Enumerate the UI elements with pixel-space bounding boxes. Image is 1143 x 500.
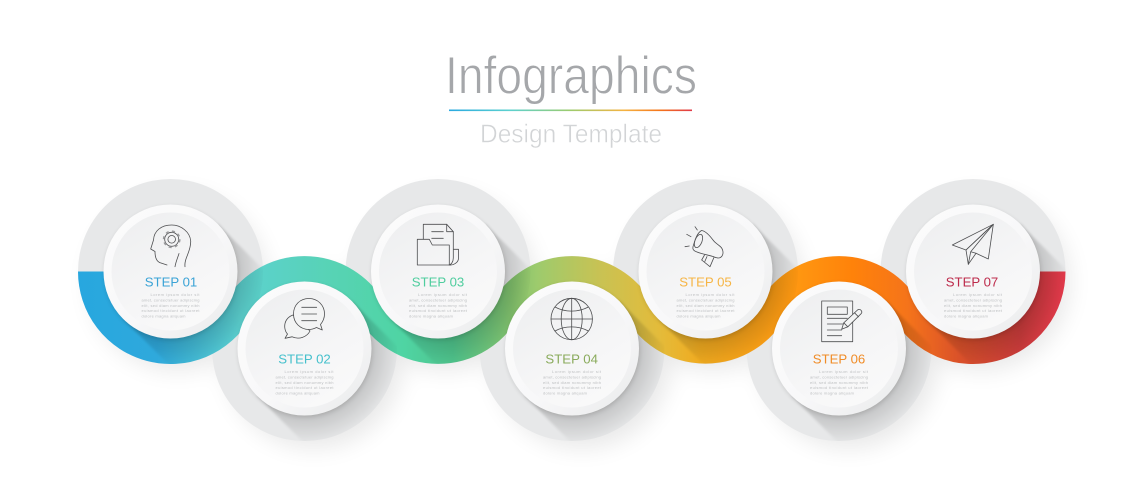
body text: dolore magna aliquam <box>276 390 320 396</box>
icon: paper plane <box>952 224 993 264</box>
body text <box>142 292 200 318</box>
body text: Lorem ipsum dolor sit <box>552 369 602 374</box>
body text: dolore magna aliquam <box>409 314 454 318</box>
title: Infographics <box>445 46 697 106</box>
panel: step 05 <box>638 204 773 340</box>
body text: euismod tincidunt ut laoreet <box>276 385 334 390</box>
body text: amet, consectetuer adipiscing <box>409 297 467 302</box>
soft ground shadows <box>90 194 1069 448</box>
icon: document and pencil <box>822 301 862 342</box>
body text: dolore magna aliquam <box>944 314 989 318</box>
panel: step 02 <box>238 282 372 417</box>
body text: elit, sed diam nonummy nibh <box>944 303 1002 308</box>
grey backing circles <box>78 179 1066 441</box>
body text: amet, consectetuer adipiscing <box>676 297 734 302</box>
body text: Lorem ipsum dolor sit <box>284 369 334 374</box>
body text: amet, consectetuer adipiscing <box>276 374 334 379</box>
body text: euismod tincidunt ut laoreet <box>142 308 200 313</box>
icon: folder with document <box>417 224 458 265</box>
body text: euismod tincidunt ut laoreet <box>543 385 602 390</box>
body text: amet, consectetuer adipiscing <box>944 297 1002 302</box>
subtitle: Design Template <box>480 118 662 148</box>
long shadows of the step circles <box>123 224 1062 438</box>
body text: euismod tincidunt ut laoreet <box>810 385 869 390</box>
step label: STEP 04 <box>545 352 598 367</box>
icon: speech bubbles <box>285 298 324 338</box>
body text: elit, sed diam nonummy nibh <box>276 380 334 385</box>
panel: step 04 <box>505 282 640 417</box>
step label: STEP 02 <box>278 352 331 367</box>
step label: STEP 07 <box>946 275 998 290</box>
body text: Lorem ipsum dolor sit <box>686 292 735 297</box>
panel: step 07 <box>906 204 1040 340</box>
body text: elit, sed diam nonummy nibh <box>543 380 601 385</box>
panel: step 03 <box>371 204 506 340</box>
icon: megaphone <box>685 227 723 267</box>
body text: euismod tincidunt ut laoreet <box>944 308 1003 313</box>
step label: STEP 01 <box>145 275 197 290</box>
step label: STEP 03 <box>412 275 464 290</box>
step label: STEP 06 <box>813 352 865 367</box>
body text <box>944 292 1003 318</box>
body text <box>543 369 602 396</box>
panel: step 01 <box>104 204 238 340</box>
icon: globe <box>551 298 592 340</box>
body text: elit, sed diam nonummy nibh <box>676 303 734 308</box>
body text: amet, consectetuer adipiscing <box>543 374 601 379</box>
body text: dolore magna aliquam <box>543 390 588 396</box>
panel: step 06 <box>772 282 906 417</box>
step label: STEP 05 <box>679 275 732 290</box>
body text: amet, consectetuer adipiscing <box>810 374 868 379</box>
body text <box>810 369 869 396</box>
icon: head with gear <box>151 225 191 267</box>
body text: elit, sed diam nonummy nibh <box>810 380 868 385</box>
body text <box>409 292 468 318</box>
body text: Lorem ipsum dolor sit <box>418 292 468 297</box>
body text: dolore magna aliquam <box>142 314 186 318</box>
body text: elit, sed diam nonummy nibh <box>142 303 200 308</box>
body text <box>276 369 334 396</box>
body text: dolore magna aliquam <box>676 314 721 318</box>
body text: dolore magna aliquam <box>810 390 855 396</box>
body text: amet, consectetuer adipiscing <box>142 297 200 302</box>
body text: Lorem ipsum dolor sit <box>953 292 1003 297</box>
rainbow wave ribbon <box>93 271 1050 349</box>
title underline <box>449 110 692 111</box>
body text: Lorem ipsum dolor sit <box>819 369 869 374</box>
body text: elit, sed diam nonummy nibh <box>409 303 467 308</box>
body text: euismod tincidunt ut laoreet <box>409 308 468 313</box>
body text: Lorem ipsum dolor sit <box>150 292 200 297</box>
body text: euismod tincidunt ut laoreet <box>676 308 735 313</box>
body text <box>676 292 735 318</box>
